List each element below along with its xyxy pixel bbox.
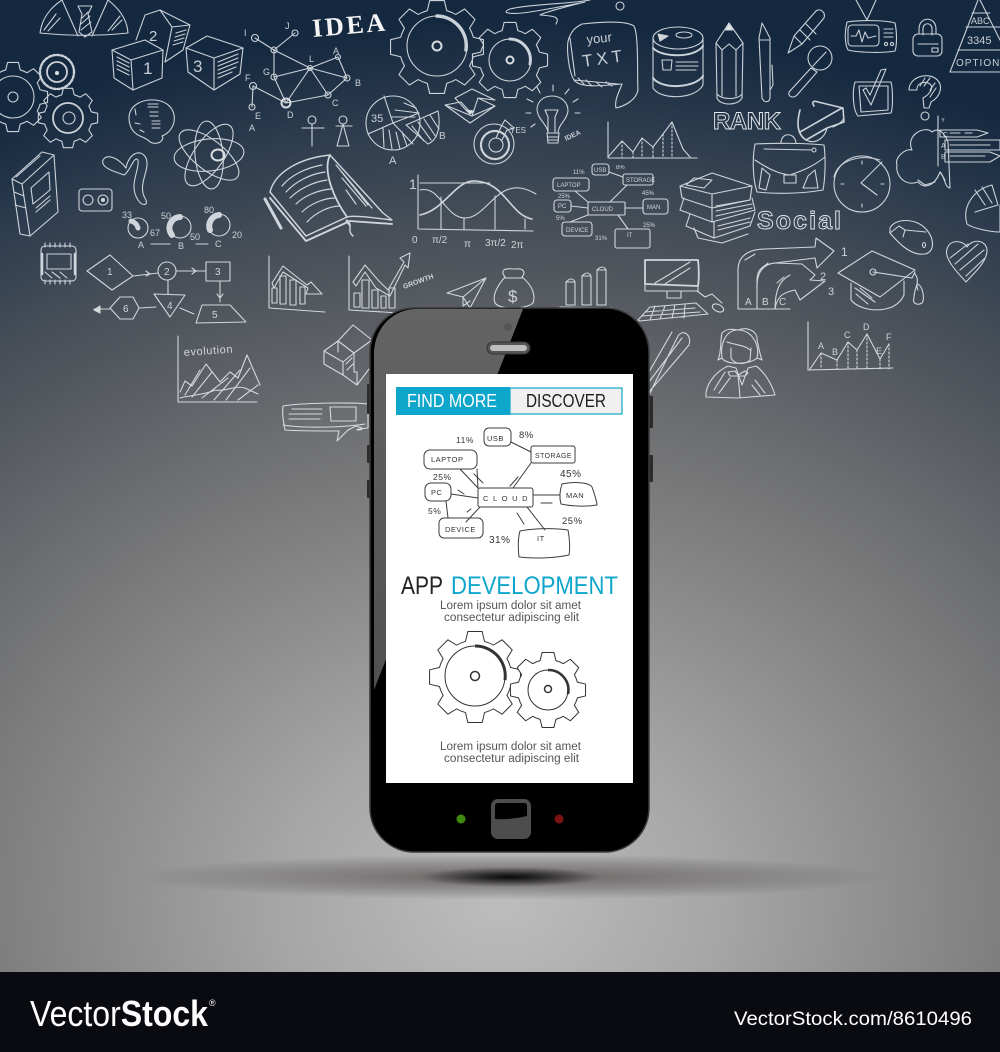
doodle: chip (41, 243, 76, 284)
doodle: triple arrows (738, 238, 834, 309)
diagram labels: USB (487, 434, 504, 443)
diagram labels: CLOUD (483, 494, 528, 503)
label: small diagram text: IT (627, 233, 633, 239)
label: small diagram text: LAPTOP (557, 183, 581, 189)
label: flowchart numbers: 3 (215, 267, 221, 278)
diagram boxes and links (424, 428, 597, 558)
label: arrow letters: B (762, 297, 769, 308)
label: pyramid text: 3345 (967, 35, 991, 47)
doodle: money bag (494, 269, 534, 308)
doodle: desktop computer (638, 260, 725, 321)
doodle: falling bar chart (269, 256, 325, 312)
floor shadow (135, 854, 885, 900)
doodle: your text bubble (568, 22, 638, 108)
doodle: numbered cubes (112, 10, 243, 90)
doodle: partial pie right (966, 185, 1000, 232)
label: growth: GROWTH (402, 273, 435, 291)
doodle: arrow bars (938, 116, 1000, 166)
label: bulb idea: IDEA (564, 129, 582, 143)
label: small pie values: 80 (204, 205, 214, 215)
doodle: social lettering: Social (757, 207, 841, 235)
label: arrow letters: C (779, 297, 786, 308)
footer bar (0, 972, 1000, 1052)
label: arrow bars letters: C (943, 132, 948, 139)
text block bottom: consectetur adipiscing elit (444, 753, 580, 765)
doodle: standing book (12, 152, 58, 236)
doodle: spiral target (474, 120, 514, 164)
doodle: padlock (913, 19, 942, 56)
text block top: consectetur adipiscing elit (444, 612, 580, 624)
label: small diagram text: 8% (616, 165, 625, 171)
label: small diagram text: CLOUD (592, 207, 614, 213)
doodle: top gears (391, 1, 548, 98)
camera (504, 323, 512, 331)
doodle: three small pies (128, 214, 230, 244)
diagram labels: LAPTOP (431, 455, 463, 464)
heading (401, 572, 618, 600)
label: small pie values: 50 (161, 211, 171, 221)
label: line chart letters: D (863, 322, 870, 332)
doodle: small cloud diagram (553, 164, 668, 248)
label: small diagram text: USB (594, 168, 606, 174)
doodle: rising bar chart (349, 253, 410, 313)
doodle: squiggle question (103, 153, 147, 204)
doodle: network graph (249, 30, 350, 110)
label: network letters: A (249, 123, 255, 133)
label: network letters: B (355, 78, 361, 88)
label: flowchart numbers: 2 (164, 267, 170, 278)
label: pie values: B (439, 131, 446, 142)
label: line chart letters: B (832, 347, 838, 357)
doodle: isometric cubes (324, 325, 372, 385)
doodle: check box (853, 69, 892, 116)
phone body (370, 308, 649, 852)
label: pie values: A (389, 155, 397, 167)
label: small diagram text: 11% (573, 170, 585, 176)
label: money sign: $ (508, 287, 518, 306)
label: small diagram text: DEVICE (566, 228, 588, 234)
doodle: left gears (0, 55, 98, 148)
label: small pie values (122, 205, 242, 251)
doodle: wave chart (418, 175, 536, 231)
doodle: magnifier (789, 46, 832, 97)
reflection shape (374, 309, 523, 690)
doodle: options pyramid (950, 0, 1000, 72)
footer logo: ® (209, 998, 216, 1008)
label: evolution: evolution (183, 344, 234, 359)
diagram labels: DEVICE (445, 525, 476, 534)
label: small diagram text (556, 165, 660, 242)
label: line chart letters: F (886, 332, 892, 342)
label: arrow bars letters: Y (941, 118, 945, 124)
label: small pie values: B (178, 241, 184, 251)
label: flowchart numbers: 5 (212, 310, 218, 321)
diagram labels: IT (537, 534, 545, 543)
doodle: can (653, 27, 703, 97)
label: wave chart values: 2π (511, 240, 524, 251)
text block bottom: Lorem ipsum dolor sit amet (440, 741, 582, 753)
label: small diagram text: 25% (558, 194, 571, 200)
doodle: letter line chart (808, 322, 893, 370)
doodle: question mark (909, 76, 941, 120)
doodle: atom (171, 117, 247, 193)
label: wave chart values: 3π/2 (485, 238, 506, 249)
label: network letters: J (285, 21, 290, 31)
doodle: rank lettering: RANK (713, 108, 782, 135)
doodle: cloud (896, 130, 950, 188)
tab: find more: FIND MORE (407, 391, 497, 411)
diagram labels: STORAGE (535, 451, 572, 460)
diagram labels: 8% (519, 430, 534, 441)
doodle: heart (946, 241, 987, 282)
doodle: glasses (798, 101, 844, 142)
label: small diagram text: 25% (643, 223, 656, 229)
label: network letters: G (263, 67, 270, 77)
doodle: light bulb (526, 85, 580, 143)
label: spiral yes: YES (510, 126, 526, 135)
doodle: evolution chart (178, 336, 260, 402)
label: cube numbers: 2 (149, 28, 157, 45)
screen gears (430, 632, 586, 728)
diagram labels: 25% (433, 472, 452, 482)
screen (386, 374, 633, 783)
text block top: Lorem ipsum dolor sit amet (440, 600, 582, 612)
label: network letters: F (245, 73, 251, 83)
label: wave chart values: 1 (409, 176, 417, 192)
label: arrow letters: A (745, 297, 752, 308)
doodle: open book (265, 155, 392, 241)
doodle: battery bars (560, 267, 612, 308)
doodle: clock (834, 156, 890, 212)
label: cube numbers: 1 (143, 59, 152, 78)
label: small diagram text: 31% (595, 236, 608, 242)
tab: find more (396, 387, 510, 415)
label: small pie values: 20 (232, 230, 242, 240)
label: network letters: I (244, 28, 247, 38)
doodle: mouse (890, 220, 932, 254)
cloud diagram (424, 428, 597, 558)
tab: discover: DISCOVER (526, 391, 606, 411)
doodle: big pencil (716, 23, 743, 104)
heading: DEVELOPMENT (451, 572, 618, 600)
doodle: IDEA lettering: IDEA (311, 8, 386, 43)
label: network letters: E (255, 111, 261, 121)
label: pyramid text (956, 16, 1000, 69)
label: pie values: 35 (371, 113, 383, 125)
label: wave chart values: π (464, 239, 471, 250)
label: flowchart numbers: 4 (167, 301, 173, 312)
label: network letters: C (332, 98, 339, 108)
label: network letters: A (333, 46, 339, 56)
green led (456, 814, 466, 824)
doodle: graduation cap (838, 251, 923, 310)
doodle: businessman (40, 0, 128, 37)
label: small pie values: A (138, 240, 144, 250)
label: small diagram text: PC (558, 204, 567, 210)
label: small diagram text: STORAGE (626, 178, 655, 184)
footer logo: VectorStock (30, 993, 209, 1034)
label: line chart letters (818, 322, 892, 357)
label: arrow letters: 2 (820, 271, 826, 283)
text block bottom (440, 741, 582, 765)
doodle: pen squiggle (506, 0, 624, 24)
label: small diagram text: 45% (642, 191, 655, 197)
side buttons (367, 384, 653, 498)
label: wave chart values: π/2 (432, 235, 448, 246)
doodle: pie chart (366, 96, 439, 150)
label: arrow bars letters: B (941, 154, 946, 161)
doodle: message speech rectangle (283, 403, 368, 441)
label: line chart letters: A (818, 341, 824, 351)
red led (554, 814, 564, 824)
footer url: VectorStock.com/8610496 (734, 1009, 972, 1030)
label: cube numbers (143, 28, 202, 78)
heading: APP (401, 572, 443, 600)
doodle: stacked books (680, 173, 755, 243)
doodle: tv (845, 0, 896, 52)
label: arrow bars letters: A (941, 143, 946, 150)
home button (491, 799, 531, 839)
label: arrow letters: 1 (841, 245, 848, 259)
doodle: pen (759, 23, 773, 102)
label: your txt: your (586, 29, 613, 47)
label: your txt (581, 29, 623, 71)
diagram labels: MAN (566, 491, 584, 500)
label: small pie values: 33 (122, 210, 132, 220)
label: small pie values: C (215, 239, 222, 249)
label: cube numbers: 3 (193, 57, 202, 76)
label: small diagram text: MAN (647, 205, 660, 211)
doodle: figure icons (302, 116, 352, 146)
doodle: pencil behind phone (649, 332, 690, 395)
label: network letters: D (287, 110, 294, 120)
doodle: list speech bubble (129, 100, 174, 143)
doodle: upper line chart (608, 122, 697, 158)
text block top (440, 600, 582, 624)
diagram labels: 31% (489, 535, 511, 546)
diagram labels: 5% (428, 506, 441, 516)
label: wave chart values (409, 176, 524, 251)
label: small pie values: 67 (150, 228, 160, 238)
doodle: diagonal pencil (788, 10, 824, 53)
label: pyramid text: ABC (971, 16, 990, 26)
label: flowchart numbers (107, 267, 221, 321)
tab: discover (510, 388, 622, 414)
label: arrow bars letters (941, 118, 948, 161)
doodle: open box (445, 89, 495, 123)
label: flowchart numbers: 6 (123, 304, 129, 315)
label: network letters: L (309, 54, 314, 64)
label: pie values (371, 113, 446, 167)
doodle: paper plane (447, 278, 486, 308)
speaker (487, 342, 530, 354)
doodle: briefcase (753, 135, 825, 193)
label: line chart letters: C (844, 330, 851, 340)
diagram labels: 25% (562, 516, 583, 527)
label: wave chart values: 0 (412, 235, 418, 246)
label: arrow letters: 3 (828, 286, 834, 298)
diagram labels: PC (431, 488, 443, 497)
doodle: flowchart (87, 255, 246, 323)
doodle: girl avatar (706, 329, 775, 398)
doodle: GO box (79, 189, 112, 211)
label: flowchart numbers: 1 (107, 267, 113, 278)
label: line chart letters: E (876, 346, 882, 356)
label: arrow letters (745, 245, 848, 308)
phone (367, 308, 653, 852)
label: your txt: TXT (581, 47, 623, 71)
label: small diagram text: 5% (556, 216, 565, 222)
diagram labels: 45% (560, 469, 582, 480)
diagram labels (428, 430, 584, 546)
label: small pie values: 50 (190, 232, 200, 242)
diagram labels: 11% (456, 435, 474, 445)
label: network letters (244, 21, 361, 133)
